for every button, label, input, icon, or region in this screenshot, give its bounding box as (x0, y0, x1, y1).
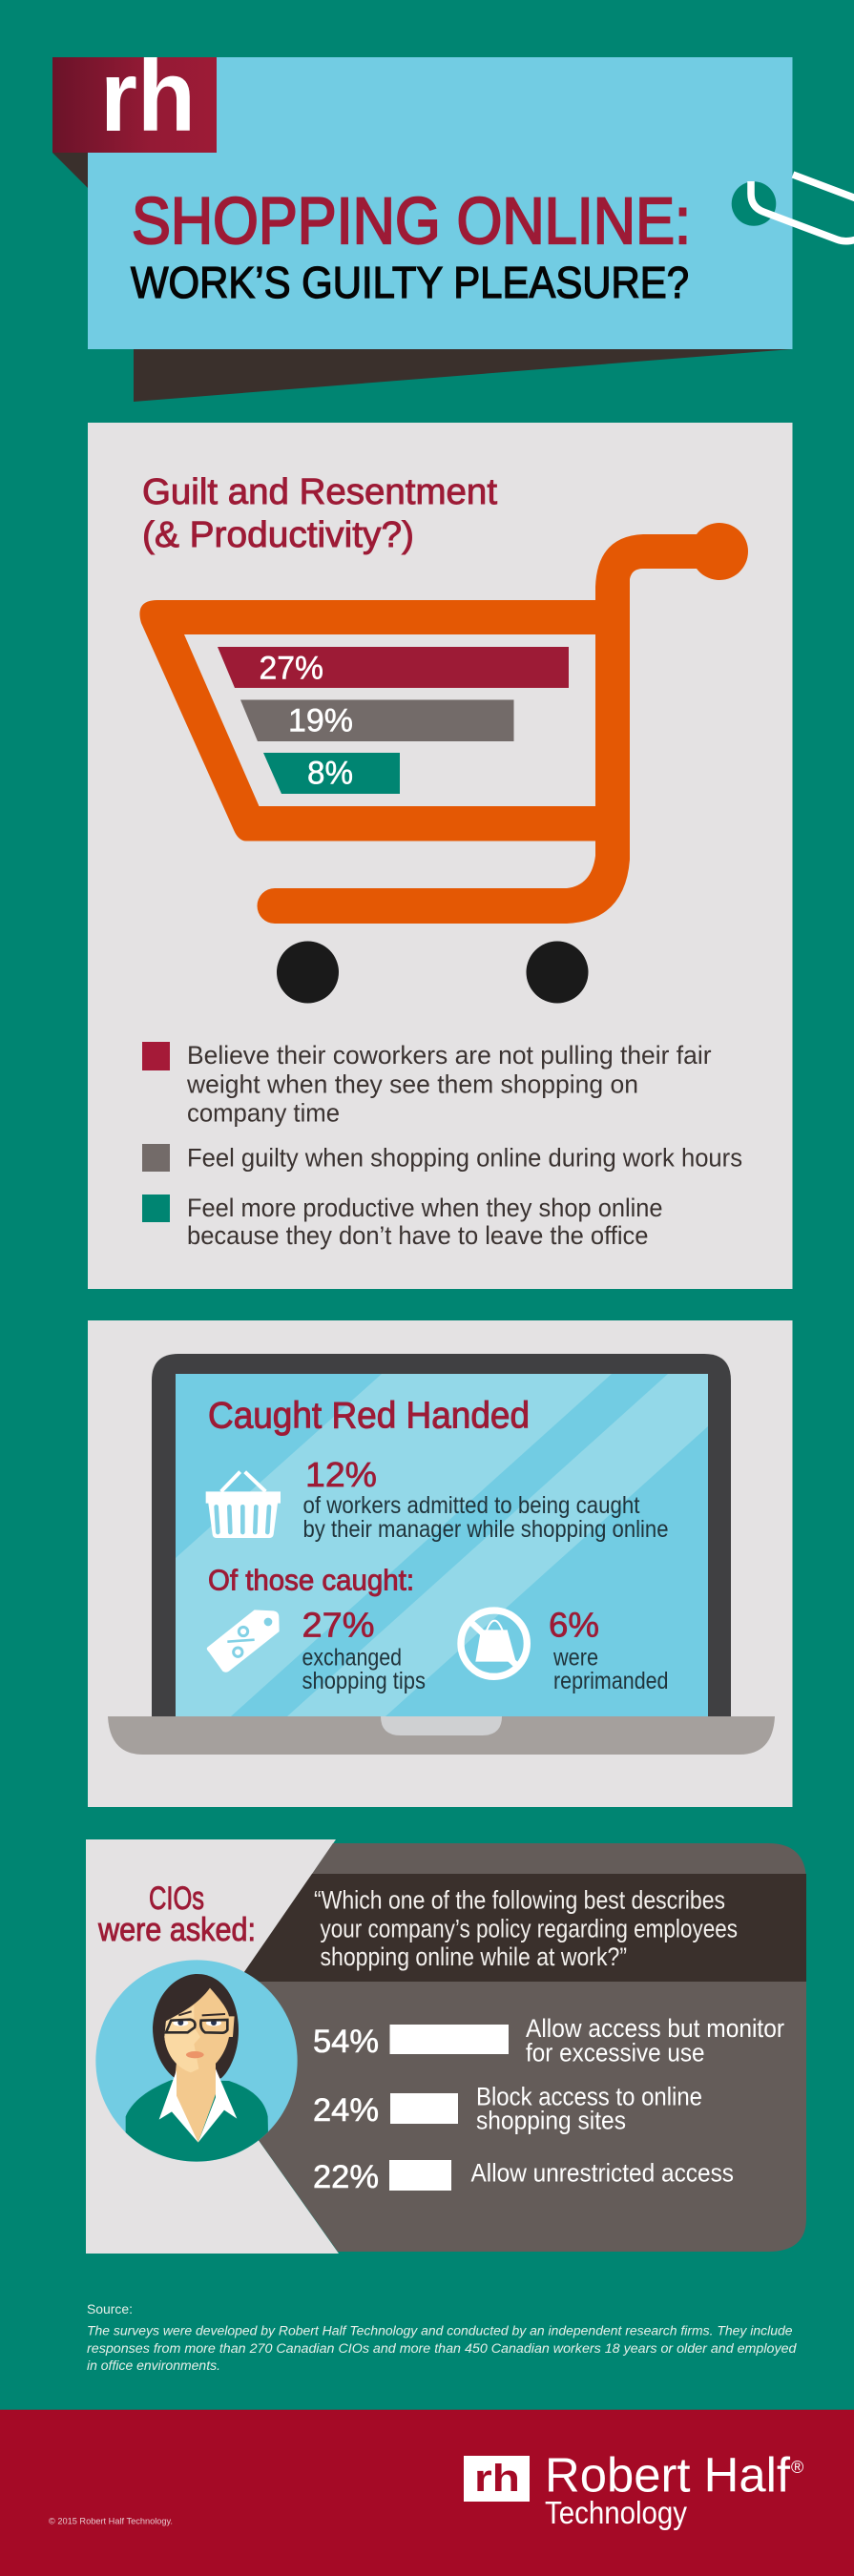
jacket (126, 2080, 269, 2164)
stat: 6%: were (552, 1645, 598, 1672)
laptop frame (152, 1354, 731, 1716)
bar: 8%: 8% (307, 756, 353, 792)
subheading: Of those caught: (208, 1564, 414, 1597)
title (131, 184, 691, 307)
icon: basket (206, 1472, 281, 1538)
legend item: coworkers (142, 1041, 712, 1128)
question (314, 1886, 738, 1971)
legend item: coworkers: Believe their coworkers are not pulling their fair (187, 1041, 712, 1070)
tag hole (732, 181, 776, 226)
result: 22%: Allow unrestricted access (471, 2159, 734, 2188)
bar: 27%: 27% (260, 651, 323, 687)
laptop (108, 1354, 775, 1755)
eyes (173, 2020, 221, 2026)
result: 54%: 54% (313, 2024, 379, 2060)
stat: 27%: 27% (302, 1606, 374, 1645)
collar (159, 2068, 237, 2143)
result: 24%: shopping sites (476, 2107, 626, 2135)
icon: shopping cart (139, 523, 748, 1004)
title: WORK’S GUILTY PLEASURE? (131, 258, 689, 307)
legend item: productive (142, 1194, 662, 1250)
stat: 12%: 12% (305, 1455, 377, 1494)
result: 24% (313, 2083, 702, 2135)
panel: guilt and resentment (88, 423, 792, 1289)
cart wheel right (527, 941, 588, 1004)
legend item: coworkers: weight when they see them shopping on (186, 1070, 638, 1099)
hair (153, 1974, 239, 2078)
banner shadow (134, 349, 792, 402)
logo: Robert Half Technology: rh (474, 2458, 520, 2500)
legend item: guilty: Feel guilty when shopping online during work hours (187, 1144, 742, 1173)
heading: CIOs (149, 1880, 204, 1917)
heading (97, 1880, 256, 1948)
result: 24%: 24% (313, 2092, 379, 2129)
heading (142, 472, 497, 555)
source note: in office environments. (87, 2358, 220, 2373)
panel: CIOs were asked (86, 1839, 806, 2254)
logo: Robert Half Technology (464, 2448, 803, 2530)
stat: 6% (461, 1606, 668, 1694)
logo: Robert Half Technology: Robert Half (545, 2448, 791, 2503)
stat: 6%: reprimanded (553, 1668, 668, 1694)
title: SHOPPING ONLINE: (132, 184, 691, 258)
stat: 12%: of workers admitted to being caught (303, 1492, 640, 1519)
source note: Source: (87, 2301, 133, 2316)
laptop screen (176, 1374, 708, 1717)
result: 22%: 22% (313, 2159, 379, 2195)
logo: Robert Half Technology: Technology (545, 2495, 687, 2530)
source note: responses from more than 270 Canadian CIOs and more than 450 Canadian workers 18 years or older and employed (87, 2341, 797, 2356)
stat: 27% (207, 1606, 426, 1694)
answers panel (193, 1843, 806, 2252)
heading: (& Productivity?) (142, 515, 414, 555)
legend item: coworkers: company time (187, 1099, 340, 1128)
banner tag (88, 57, 792, 349)
legend item: productive: Feel more productive when they shop online (187, 1194, 662, 1222)
bar: 27% (218, 647, 569, 688)
lips (186, 2051, 204, 2058)
question: shopping online while at work?” (321, 1942, 627, 1971)
question: “Which one of the following best describes (314, 1886, 725, 1915)
survey results (313, 2014, 784, 2195)
source note: The surveys were developed by Robert Half Technology and conducted by an independent research firms. They include (87, 2324, 792, 2338)
stat: 12%: by their manager while shopping online (303, 1516, 668, 1543)
stat: 6%: 6% (549, 1606, 599, 1645)
legend (142, 1041, 742, 1250)
neck and chest (174, 2063, 216, 2143)
logo: rh: rh (100, 40, 196, 153)
laptop notch (381, 1716, 502, 1735)
light panel (86, 1839, 339, 2254)
face highlight (164, 2005, 200, 2072)
result: 22% (313, 2159, 734, 2195)
bar: 19%: 19% (288, 702, 353, 738)
header banner (52, 40, 854, 402)
bar: 8% (263, 753, 400, 794)
panel: caught red handed (88, 1320, 792, 1807)
result: 54%: for excessive use (526, 2039, 704, 2067)
stat: 27%: exchanged (302, 1645, 402, 1672)
footer (0, 2410, 854, 2576)
heading: were asked: (97, 1912, 256, 1948)
cart wheel left (277, 941, 339, 1004)
face (164, 1988, 235, 2072)
copyright: © 2015 Robert Half Technology. (49, 2517, 173, 2526)
bar: 19% (240, 700, 513, 741)
heading: Caught Red Handed (208, 1396, 530, 1437)
logo fold (52, 153, 88, 188)
icon: paperclip (751, 175, 854, 241)
icon: no shopping bag (461, 1610, 527, 1676)
icon: price tag (207, 1610, 280, 1672)
question: your company’s policy regarding employees (321, 1915, 738, 1943)
illustration: woman (95, 1960, 298, 2164)
glasses (166, 2020, 227, 2033)
bar chart (218, 647, 569, 794)
result: 54%: Allow access but monitor (526, 2014, 784, 2043)
logo: Robert Half Technology: ® (791, 2458, 803, 2477)
eyebrows (178, 2011, 225, 2015)
laptop base (108, 1716, 775, 1755)
legend item: productive: because they don’t have to leave the office (187, 1221, 649, 1250)
logo: rh (52, 40, 217, 153)
stat: 12% (206, 1455, 669, 1543)
heading: Guilt and Resentment (142, 472, 497, 512)
question band (238, 1874, 806, 1982)
result: 54% (313, 2014, 784, 2067)
result: 24%: Block access to online (476, 2083, 702, 2111)
source note (87, 2301, 797, 2373)
stat: 27%: shopping tips (302, 1668, 426, 1694)
